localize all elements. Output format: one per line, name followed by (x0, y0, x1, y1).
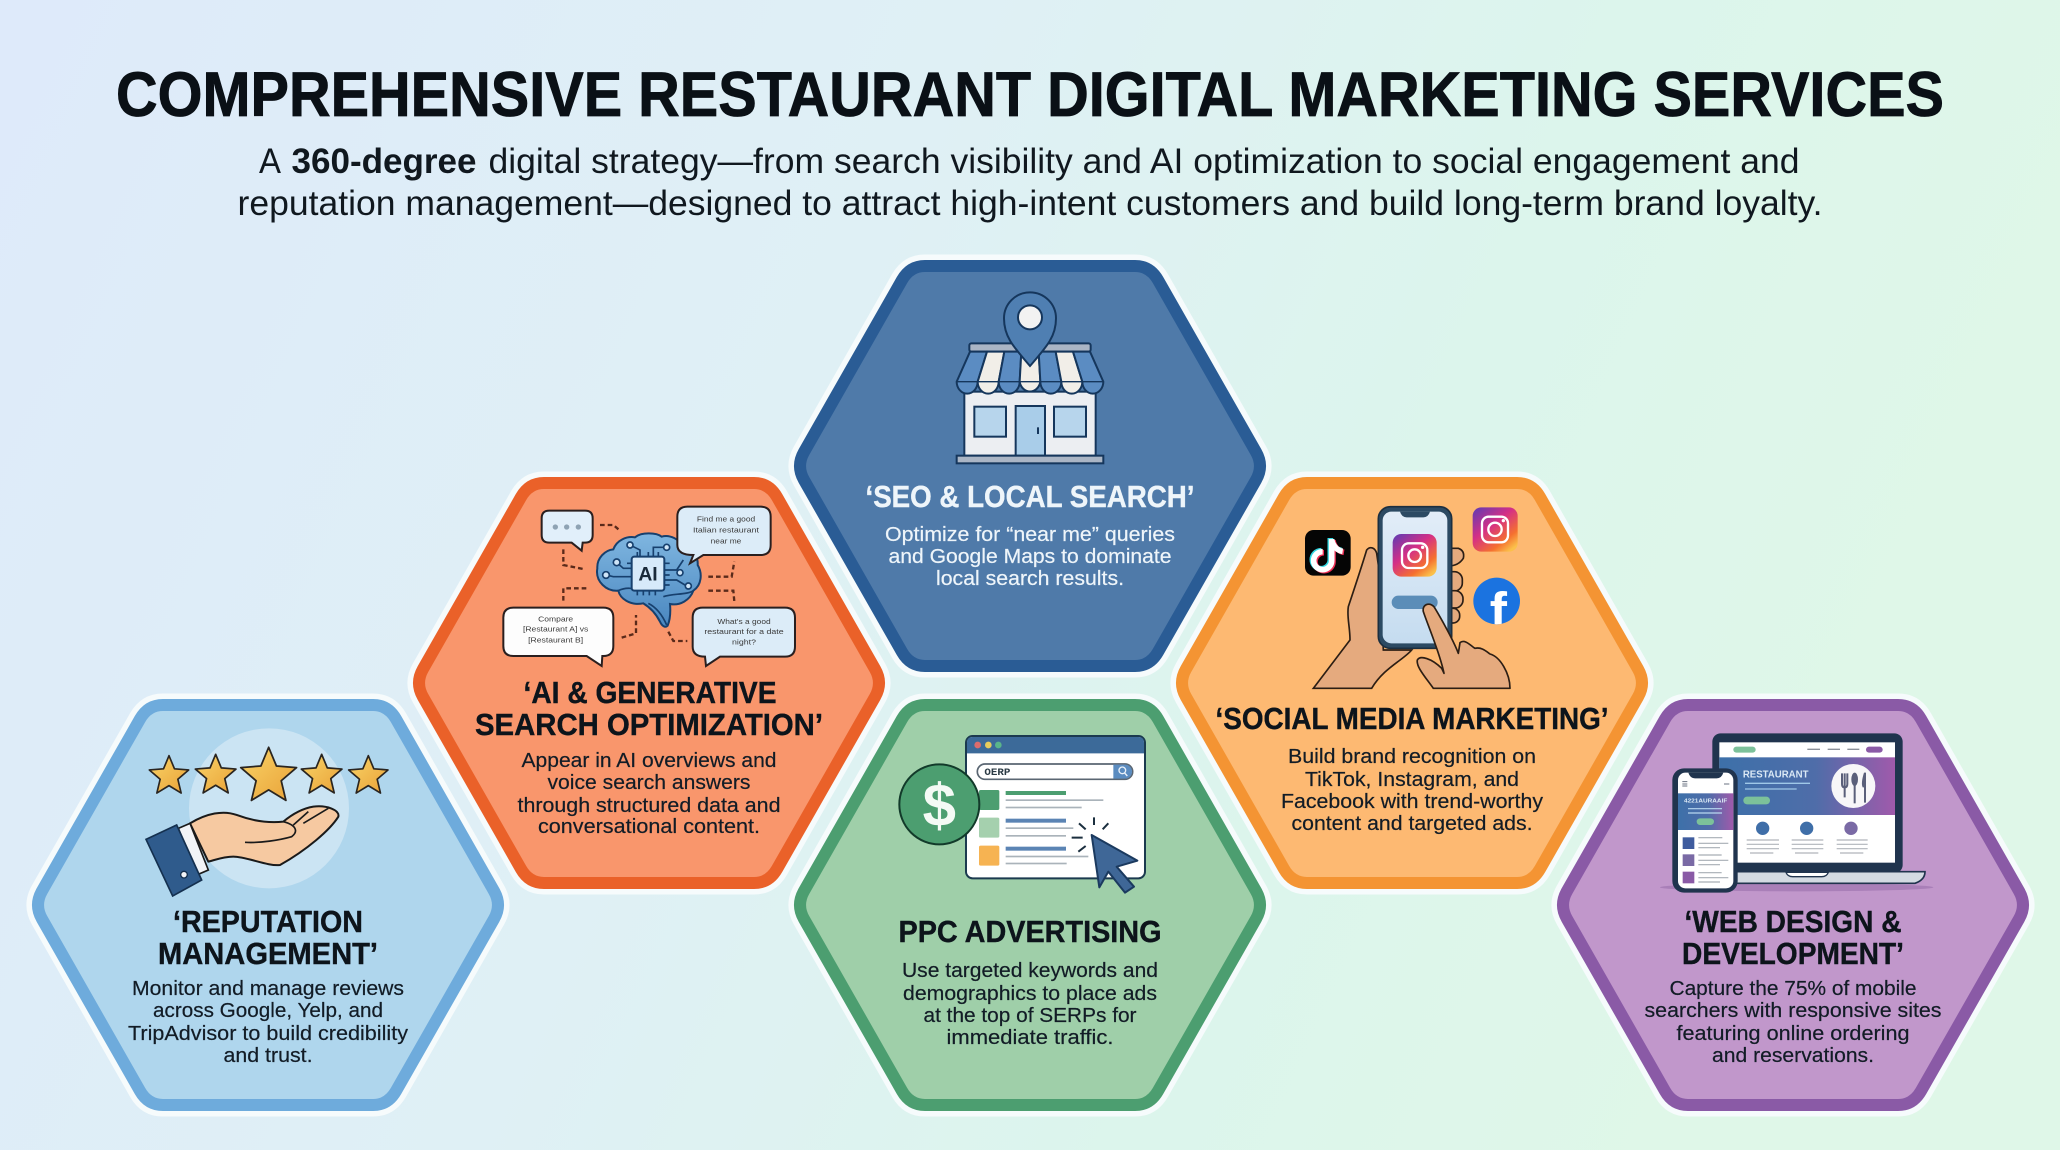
text: reputation description: and trust. (224, 1044, 312, 1067)
panel: SEO & local search (800, 266, 1260, 666)
heading: reputation: ‘REPUTATION (173, 904, 363, 939)
heading: SEO: ‘SEO & LOCAL SEARCH’ (866, 479, 1194, 514)
text: SEO description (885, 523, 1175, 590)
icon: hands holding phone with social logos: f (1490, 581, 1508, 639)
icon: laptop and phone showing restaurant site: 4221AURAAIF (1684, 799, 1728, 805)
text: social description: TikTok, Instagram, and (1305, 768, 1519, 791)
text: SEO description: Optimize for “near me” queries (885, 523, 1175, 546)
icon: AI brain with chat bubbles: Compare (538, 615, 573, 624)
text: social description: content and targeted ads. (1292, 812, 1532, 835)
panel: web design & development (1563, 705, 2023, 1105)
icon: AI brain with chat bubbles: night? (732, 637, 756, 646)
icon: AI brain with chat bubbles: AI (638, 565, 658, 586)
text: PPC description: Use targeted keywords and (902, 959, 1158, 982)
heading: social: ‘SOCIAL MEDIA MARKETING’ (1216, 701, 1608, 736)
text: web description: and reservations. (1712, 1044, 1874, 1067)
icon: AI brain with chat bubbles: [Restaurant B] (528, 636, 583, 645)
text: PPC description: demographics to place ads (903, 982, 1157, 1005)
hexagon: web (1563, 705, 2023, 1105)
hexagon: social (1182, 483, 1642, 883)
icon: laptop and phone showing restaurant site (1660, 733, 1933, 893)
icon: search results window with dollar coin and cursor (899, 736, 1145, 893)
text: AI description (518, 749, 780, 838)
panel: AI & generative search optimization (419, 483, 879, 883)
subtitle: A (259, 142, 282, 181)
text: reputation description: Monitor and manage reviews (132, 977, 404, 1000)
hexagon: SEO (800, 266, 1260, 666)
icon: hands holding phone with social logos (1305, 507, 1520, 688)
text: web description: searchers with responsive sites (1644, 999, 1942, 1022)
heading: PPC: PPC ADVERTISING (898, 914, 1162, 949)
text: AI description: voice search answers (548, 771, 750, 794)
icon: AI brain with chat bubbles: near me (711, 536, 741, 545)
icon: AI brain with chat bubbles: restaurant for a date (704, 627, 784, 636)
icon: hand holding five stars (146, 728, 388, 896)
text: PPC description: at the top of SERPs for (924, 1004, 1137, 1027)
text: reputation description: across Google, Yelp, and (153, 999, 383, 1022)
hexagon: AI (419, 483, 879, 883)
icon: search results window with dollar coin and cursor: $ (923, 772, 956, 839)
icon: AI brain with chat bubbles: [Restaurant A] vs (523, 625, 589, 634)
subtitle (238, 142, 1822, 223)
text: web description (1644, 977, 1942, 1067)
panel: PPC advertising (800, 705, 1260, 1105)
text: web description: Capture the 75% of mobile (1670, 977, 1916, 1000)
hexagon: PPC (800, 705, 1260, 1105)
text: social description (1281, 745, 1544, 835)
subtitle: 360-degree (292, 142, 476, 181)
text: AI description: through structured data and (518, 794, 780, 817)
text: social description: Facebook with trend-worthy (1281, 790, 1544, 813)
title: COMPREHENSIVE RESTAURANT DIGITAL MARKETING SERVICES (116, 60, 1944, 130)
text: PPC description (902, 959, 1158, 1049)
panel: social media marketing (1182, 483, 1642, 883)
text: reputation description (128, 977, 409, 1067)
subtitle: digital strategy—from search visibility and AI optimization to social engagement and (488, 142, 1800, 181)
text: SEO description: and Google Maps to dominate (888, 545, 1172, 568)
heading: web: ‘WEB DESIGN & (1684, 904, 1902, 939)
heading: AI: ‘AI & GENERATIVE (524, 675, 776, 710)
heading: web: DEVELOPMENT’ (1682, 936, 1904, 971)
text: AI description: conversational content. (538, 815, 760, 838)
heading: AI: SEARCH OPTIMIZATION’ (475, 707, 823, 742)
icon: storefront with map pin (957, 292, 1103, 463)
icon: AI brain with chat bubbles: What's a good (717, 617, 771, 626)
text: social description: Build brand recognition on (1288, 745, 1536, 768)
icon: AI brain with chat bubbles (503, 507, 795, 666)
subtitle: reputation management—designed to attract high-intent customers and build long-term brand loyalty. (238, 184, 1822, 223)
text: SEO description: local search results. (936, 567, 1124, 590)
text: AI description: Appear in AI overviews and (522, 749, 776, 772)
icon: laptop and phone showing restaurant site: RESTAURANT (1743, 769, 1809, 780)
heading: AI (475, 675, 823, 742)
icon: AI brain with chat bubbles: Find me a good (697, 515, 755, 524)
hexagon: reputation (38, 705, 498, 1105)
text: web description: featuring online ordering (1676, 1022, 1910, 1045)
icon: AI brain with chat bubbles: Italian restaurant (693, 526, 760, 535)
heading: reputation (158, 904, 378, 971)
panel: reputation management (38, 705, 498, 1105)
heading: reputation: MANAGEMENT’ (158, 936, 378, 971)
icon: search results window with dollar coin and cursor: OERP (984, 767, 1010, 778)
heading: web (1682, 904, 1904, 971)
text: PPC description: immediate traffic. (946, 1026, 1114, 1049)
text: reputation description: TripAdvisor to build credibility (128, 1022, 409, 1045)
